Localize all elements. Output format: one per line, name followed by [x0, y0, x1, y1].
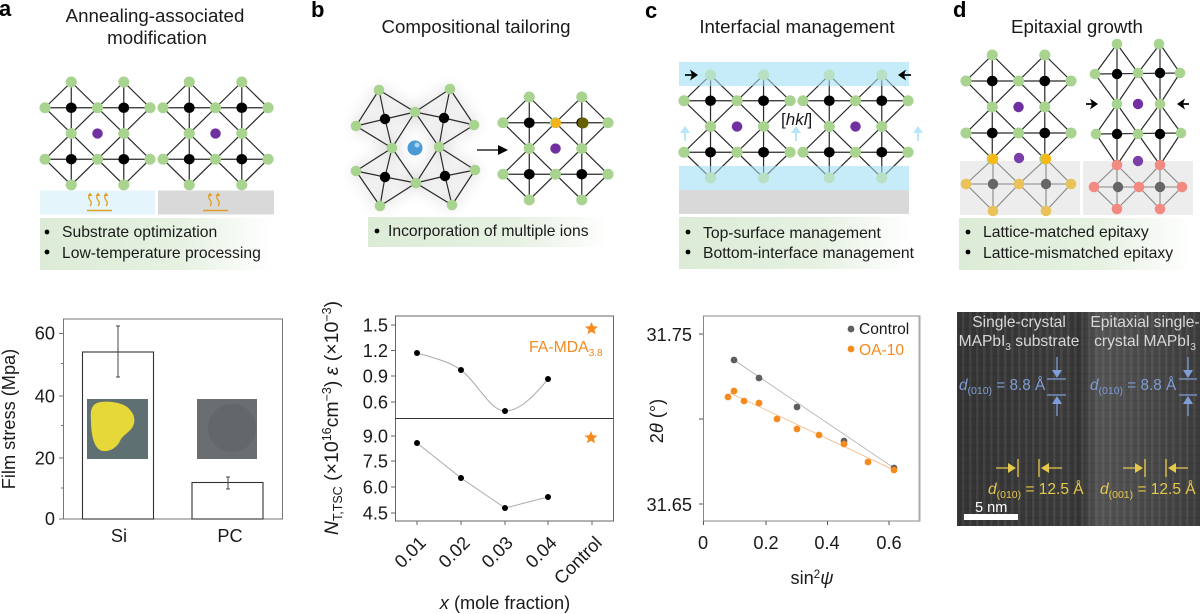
x axis title c: 2 [814, 569, 820, 581]
title c: Interfacial management [699, 16, 895, 37]
matched lattice [960, 50, 1077, 216]
photo: PC film [197, 399, 257, 459]
x ticks c: 0.6 [876, 533, 902, 553]
lattice right [157, 77, 274, 190]
lattice left [39, 77, 156, 190]
yellow spacing annotation left [988, 459, 1084, 501]
blue spacing annotation right: d [1090, 377, 1099, 394]
scale bar [964, 500, 1018, 520]
scale bar: 5 nm [975, 500, 1007, 516]
strain series [414, 350, 551, 414]
y axis title b: ) [321, 375, 343, 387]
blue spacing annotation left: (010) [968, 385, 992, 397]
y axis title b: ) [321, 301, 343, 307]
y ticks c [646, 325, 692, 515]
title b: Compositional tailoring [381, 16, 571, 37]
y ticks c: 31.75 [646, 325, 692, 345]
title d: Epitaxial growth [1011, 16, 1143, 37]
x ticks c: 0.4 [814, 533, 840, 553]
y ticks b: 4.5 [363, 504, 388, 524]
y tick labels a: 40 [35, 386, 55, 406]
x axis title b: x (mole fraction) [439, 593, 570, 613]
panel b: compositional tailoring [311, 0, 614, 247]
y tick labels a: 60 [35, 324, 55, 344]
FA-MDA label: FA-MDA [529, 339, 589, 356]
title a: modification [107, 27, 207, 48]
y ticks b: 1.5 [363, 316, 388, 336]
yellow spacing annotation left: = 12.5 Å [1021, 481, 1084, 498]
yellow spacing annotation right: d [1100, 481, 1110, 498]
error bars [116, 326, 230, 489]
text box c: Top-surface management [703, 225, 882, 242]
title a: Annealing-associated [66, 5, 244, 26]
yellow spacing annotation left: d [988, 481, 998, 498]
y ticks c: 31.65 [646, 495, 692, 515]
y tick labels a: 20 [35, 448, 55, 468]
lattice c right [797, 70, 914, 183]
compression arrows d [1086, 98, 1189, 110]
caption right: crystal MAPbI [1094, 333, 1190, 350]
x tick labels b: 0.04 [522, 533, 561, 572]
y ticks b: 0.6 [363, 392, 388, 412]
text box c [679, 217, 915, 269]
lattice c left [678, 70, 796, 183]
caption left: Single-crystal [972, 314, 1066, 331]
text box a: Low-temperature processing [62, 245, 261, 262]
yellow spacing annotation left: (010) [997, 489, 1021, 501]
panel a: annealing-associated modification [0, 0, 274, 270]
OA-10 series [725, 388, 897, 473]
y tick labels a [35, 324, 55, 529]
x labels a: Si [111, 526, 127, 546]
y ticks b: 0.9 [363, 366, 388, 386]
compression arrows [685, 70, 911, 80]
y axis title b: −3 [320, 307, 334, 322]
frame c [699, 316, 920, 525]
text box b: Incorporation of multiple ions [388, 223, 589, 240]
legend c [848, 321, 909, 359]
caption left: MAPbI [959, 333, 1005, 350]
y ticks b [363, 316, 388, 524]
y axis title b: −3 [320, 387, 334, 401]
y axis title c: 2θ (°) [647, 399, 667, 443]
mismatched lattice [1089, 39, 1187, 214]
blue spacing annotation left [959, 357, 1066, 416]
micrograph background [957, 312, 1200, 526]
x tick labels b: 0.03 [478, 533, 517, 572]
text box c: Bottom-interface management [703, 245, 915, 262]
x tick labels b: 0.01 [391, 533, 430, 572]
caption left [959, 314, 1079, 353]
panel c: interfacial management [645, 0, 923, 269]
ordered lattice with dopants [497, 92, 614, 205]
substrate bands [679, 62, 909, 214]
x labels a: PC [217, 526, 243, 546]
x ticks c: 0 [698, 533, 708, 553]
caption left: substrate [1011, 333, 1079, 350]
bar PC [192, 482, 263, 519]
yellow spacing annotation right [1100, 459, 1196, 501]
text box a [40, 218, 272, 270]
blue spacing annotation left: d [959, 377, 968, 394]
x ticks c [698, 533, 902, 553]
blue spacing annotation left: = 8.8 Å [992, 377, 1046, 394]
text box a: Substrate optimization [62, 224, 217, 241]
x axis title c: ψ [820, 568, 833, 588]
y axis title b: cm [321, 401, 343, 427]
y axis title b: (×10 [321, 441, 343, 486]
photo: Si film [87, 399, 148, 459]
y axis title b: N [321, 520, 343, 535]
y axis title b: T,TSC [331, 486, 345, 521]
x labels a [111, 526, 243, 546]
blue spacing annotation right: (010) [1099, 385, 1123, 397]
x tick labels b: 0.02 [435, 533, 474, 572]
blue spacing annotation right [1090, 357, 1197, 416]
substrate: blue with heat [40, 190, 155, 214]
x axis title c: sin [791, 568, 814, 588]
text box d: Lattice-matched epitaxy [983, 224, 1149, 241]
legend c: Control [859, 321, 909, 338]
substrate boxes [960, 161, 1193, 215]
text box d: Lattice-mismatched epitaxy [983, 245, 1173, 262]
yellow spacing annotation right: (001) [1109, 489, 1133, 501]
dual line chart: strain and trap density [320, 301, 614, 613]
y axis title b: 16 [320, 427, 334, 441]
bar chart: film stress [0, 319, 282, 546]
x tick labels b: Control [550, 533, 606, 588]
y ticks b: 7.5 [363, 452, 388, 472]
substrate: grey with heat [158, 190, 274, 214]
text box b [368, 217, 610, 247]
x tick labels b [391, 533, 606, 588]
y axis title b: ε (×10 [321, 322, 343, 375]
plot frame and ticks a [59, 319, 282, 519]
bar Si [82, 352, 154, 519]
stars [584, 322, 598, 443]
blue spacing annotation right: = 8.8 Å [1123, 377, 1177, 394]
arrow b [477, 145, 508, 155]
caption right: Epitaxial single- [1090, 314, 1200, 331]
hkl label: [hkl] [781, 110, 812, 129]
caption left: 3 [1005, 342, 1011, 353]
control series [731, 357, 897, 471]
y ticks b: 6.0 [363, 478, 388, 498]
panel d: epitaxial growth [953, 0, 1193, 270]
caption right: 3 [1190, 342, 1196, 353]
frame b [391, 316, 614, 525]
x ticks c: 0.2 [753, 533, 779, 553]
FA-MDA label: 3.8 [589, 348, 603, 359]
y ticks b: 1.2 [363, 341, 388, 361]
scatter chart: sin2psi [646, 316, 920, 588]
TEM micrograph panel [957, 312, 1200, 526]
text box d [959, 218, 1191, 270]
y tick labels a: 0 [45, 509, 55, 529]
legend c: OA-10 [859, 342, 904, 359]
y ticks b: 9.0 [363, 426, 388, 446]
trap density series [414, 440, 551, 511]
caption right [1090, 314, 1200, 353]
distorted lattice [351, 84, 480, 211]
light blue up arrows [680, 126, 923, 141]
yellow spacing annotation right: = 12.5 Å [1133, 481, 1196, 498]
